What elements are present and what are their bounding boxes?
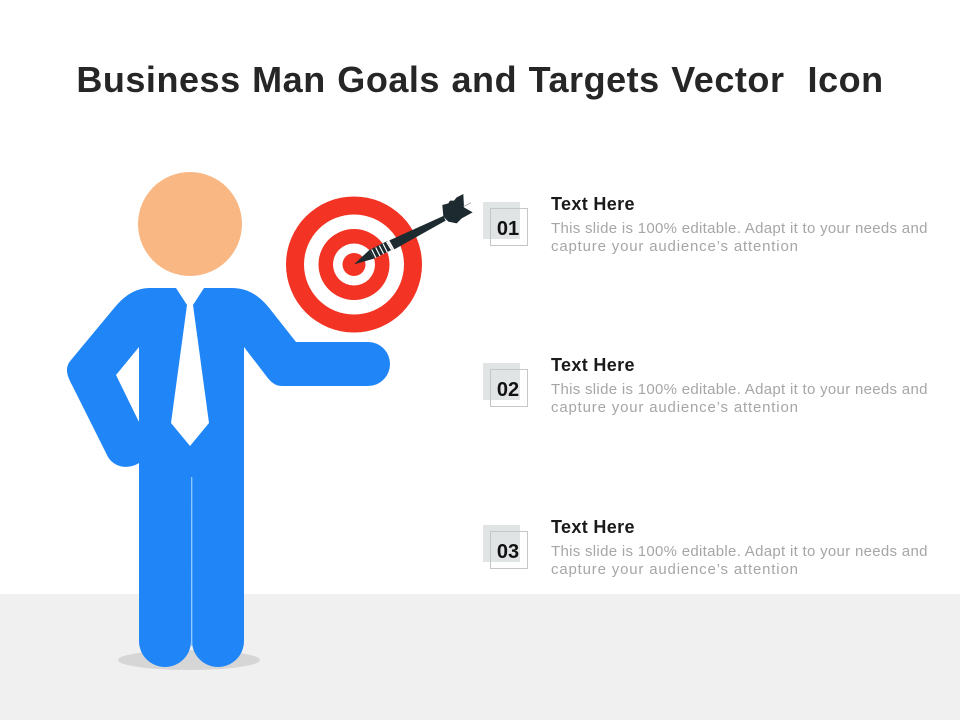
- body 01: This slide is 100% editable. Adapt it to your needs and: [551, 220, 928, 237]
- body 02: capture your audience’s attention: [551, 399, 799, 416]
- floor band: [0, 594, 960, 720]
- body 01: [551, 220, 928, 255]
- item 02: [483, 355, 928, 416]
- dart: [354, 194, 473, 264]
- number badge 02: 02: [497, 379, 519, 401]
- number badge 03: 03: [497, 541, 519, 563]
- title: Business Man Goals and Targets Vector Icon: [76, 59, 884, 100]
- number badge 02: [483, 363, 528, 407]
- body 03: This slide is 100% editable. Adapt it to your needs and: [551, 543, 928, 560]
- figure shadow: [118, 650, 260, 670]
- heading 01: Text Here: [551, 194, 635, 214]
- body 02: This slide is 100% editable. Adapt it to your needs and: [551, 381, 928, 398]
- item 01: [483, 194, 928, 255]
- heading 03: Text Here: [551, 517, 635, 537]
- body 03: [551, 543, 928, 578]
- man body: [67, 288, 390, 667]
- item 03: [483, 517, 928, 578]
- man head: [138, 172, 242, 276]
- number badge 01: 01: [497, 218, 519, 240]
- body 01: capture your audience’s attention: [551, 238, 799, 255]
- target: [286, 196, 422, 332]
- heading 02: Text Here: [551, 355, 635, 375]
- number badge 01: [483, 202, 528, 246]
- body 02: [551, 381, 928, 416]
- number badge 03: [483, 525, 528, 569]
- body 03: capture your audience’s attention: [551, 561, 799, 578]
